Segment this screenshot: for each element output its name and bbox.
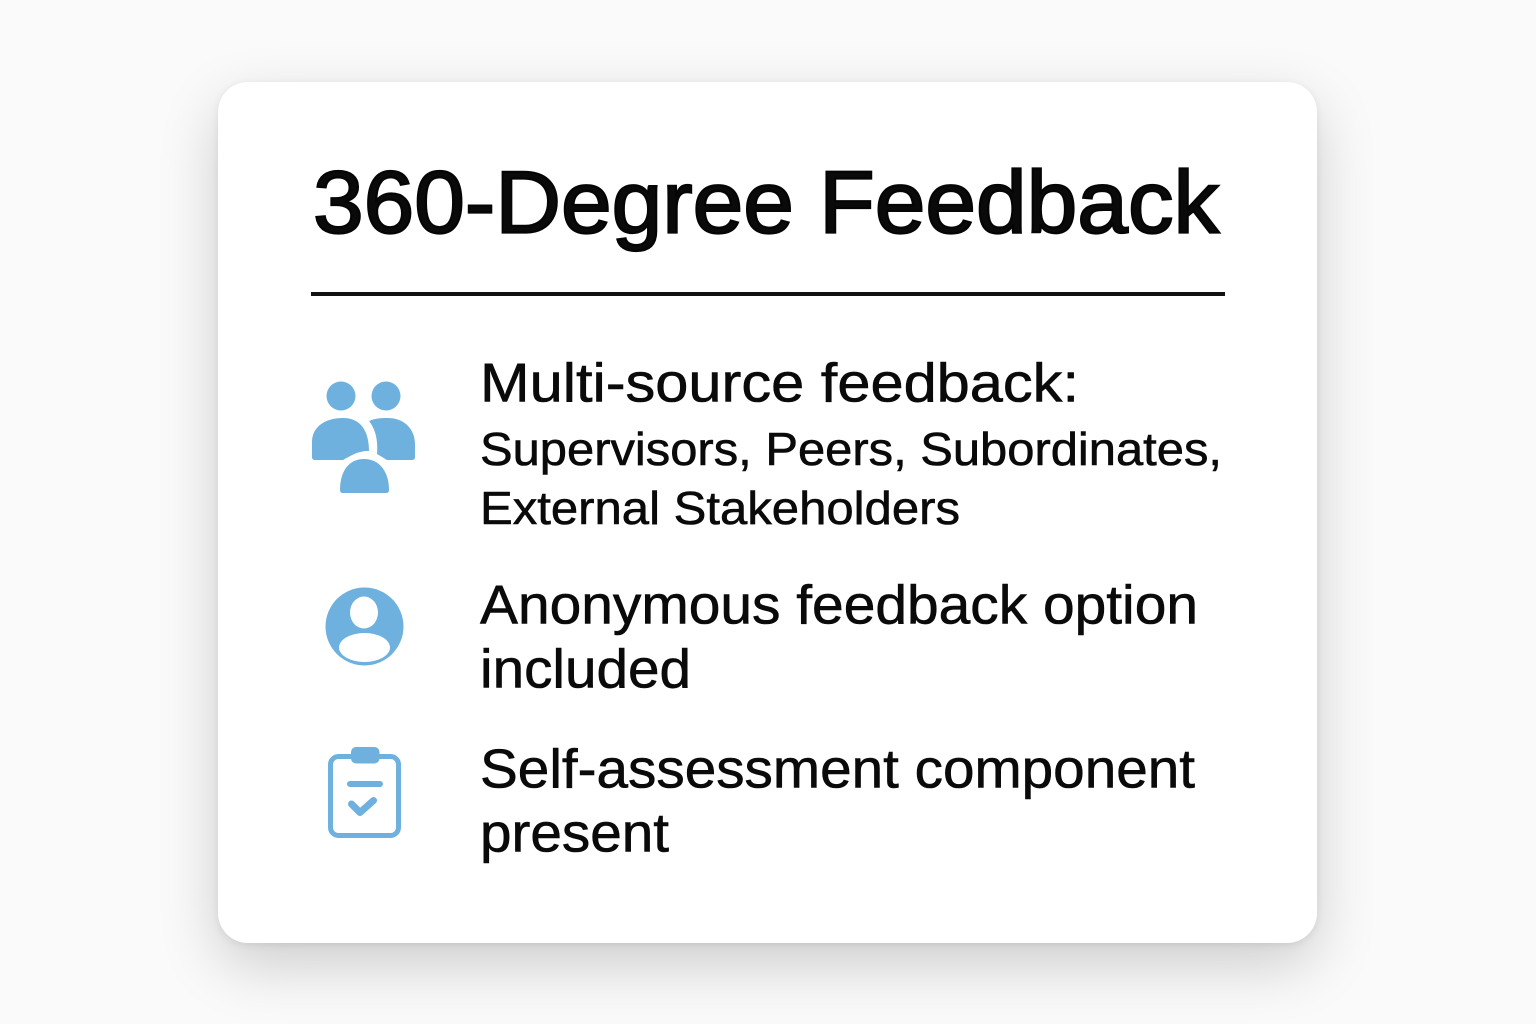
text: anonymous feedback: Anonymous feedback option: [480, 574, 1198, 636]
title: 360-Degree Feedback: [313, 152, 1220, 252]
icon: clipboard checklist: [330, 747, 398, 836]
icon: group of people: [312, 382, 415, 493]
text: multi-source feedback: Supervisors, Peers, Subordinates,: [480, 423, 1222, 475]
text: multi-source feedback: Multi-source feedback:: [480, 352, 1079, 414]
panel: card: [218, 82, 1317, 943]
text: self-assessment: present: [480, 802, 669, 864]
text: multi-source feedback: [480, 352, 1222, 534]
text: multi-source feedback: External Stakeholders: [480, 482, 960, 534]
text: self-assessment: Self-assessment component: [480, 738, 1195, 800]
text: anonymous feedback: [480, 574, 1198, 700]
icon: anonymous user: [326, 588, 404, 666]
text: self-assessment: [480, 738, 1195, 864]
text: anonymous feedback: included: [480, 638, 691, 700]
title divider: [311, 292, 1225, 296]
